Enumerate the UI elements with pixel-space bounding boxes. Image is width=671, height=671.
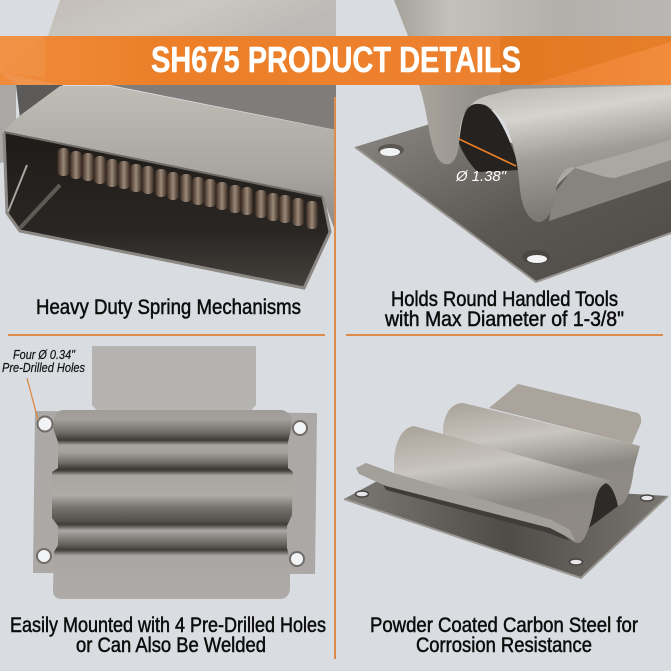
caption: round handled tools (384, 288, 624, 331)
caption: spring: Heavy Duty Spring Mechanisms (36, 296, 301, 319)
panel: top view with mounting holes (2, 346, 317, 599)
rear tab (92, 346, 256, 414)
holes (37, 416, 307, 566)
caption: round handled tools: with Max Diameter of 1-3/8" (384, 308, 624, 331)
hollow (459, 103, 520, 172)
front tube (459, 85, 671, 222)
front tube (394, 426, 612, 543)
horizontal divider left (8, 334, 325, 336)
plate holes (378, 144, 550, 264)
diameter label: Ø 1.38" (455, 168, 507, 185)
diameter line (459, 139, 516, 166)
callout: hole size (2, 347, 85, 420)
flap top face (3, 86, 334, 228)
upper metal body (48, 0, 336, 36)
caption: mounting: or Can Also Be Welded (76, 634, 266, 657)
orange band (0, 36, 671, 85)
callout: hole size: Pre-Drilled Holes (2, 360, 85, 375)
banner shading (0, 36, 671, 85)
panel: round tool diameter photo (355, 0, 671, 282)
plate edge (344, 496, 668, 578)
spring coils (58, 148, 318, 229)
back tube (443, 403, 640, 506)
title banner (0, 36, 671, 85)
arch shadow (586, 483, 618, 530)
back wall and left fold (419, 85, 671, 164)
panel: spring mechanism photo (0, 0, 336, 288)
vertical divider (334, 97, 336, 659)
base plate (33, 411, 317, 574)
flange underside shade (380, 478, 570, 541)
caption: coating (370, 614, 638, 657)
caption: round handled tools: Holds Round Handled Tools (391, 288, 618, 311)
cavity rim (4, 132, 323, 197)
caption: coating: Corrosion Resistance (416, 634, 592, 657)
flange strip (556, 140, 671, 186)
plate edge (355, 147, 671, 282)
base plate (355, 124, 671, 282)
upper metal above banner (394, 0, 671, 36)
base plate (344, 479, 668, 578)
caption: coating: Powder Coated Carbon Steel for (370, 614, 638, 637)
callout: hole size: Four Ø 0.34" (13, 347, 76, 362)
caption: mounting (10, 614, 326, 657)
cavity (4, 133, 330, 287)
ribbed body (52, 410, 293, 599)
under flange shade (549, 150, 671, 221)
horizontal divider right (346, 334, 663, 336)
rear tab (489, 384, 641, 444)
flange (356, 463, 575, 541)
plate holes (356, 491, 654, 565)
shadowed body under banner (0, 85, 336, 163)
title text: SH675 PRODUCT DETAILS (151, 39, 521, 80)
panel: angled view photo (344, 384, 668, 578)
caption: mounting: Easily Mounted with 4 Pre-Drilled Holes (10, 614, 326, 637)
